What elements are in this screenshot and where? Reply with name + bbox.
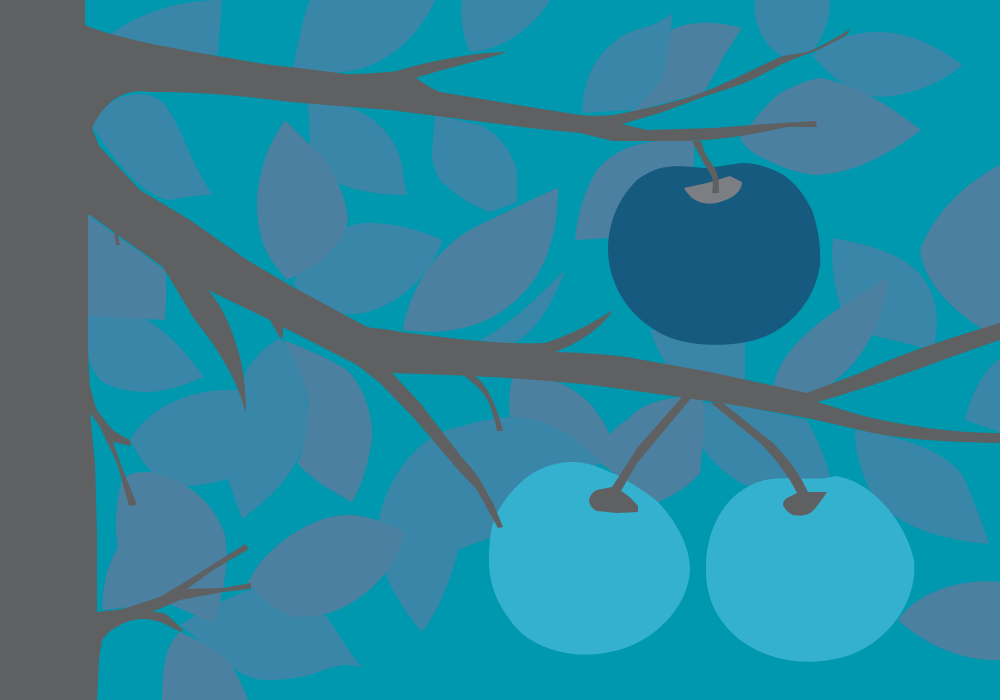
trunk with lower left limbs <box>0 0 251 700</box>
apple: dark <box>608 141 820 345</box>
dark apple body <box>608 163 820 345</box>
branch tip over left apple <box>413 403 503 528</box>
apple: light left <box>489 397 692 655</box>
twig on main branch <box>463 375 503 431</box>
left apple stem and hollow <box>589 397 692 513</box>
dark apple hollow <box>684 176 742 204</box>
apple: light right <box>706 402 914 662</box>
right apple body <box>706 476 914 662</box>
dark apple stem <box>692 141 719 193</box>
upper branch <box>80 25 850 141</box>
right apple stem and hollow <box>710 402 827 516</box>
left apple body <box>489 462 690 655</box>
small stub <box>114 232 120 245</box>
main branch <box>78 128 1000 455</box>
